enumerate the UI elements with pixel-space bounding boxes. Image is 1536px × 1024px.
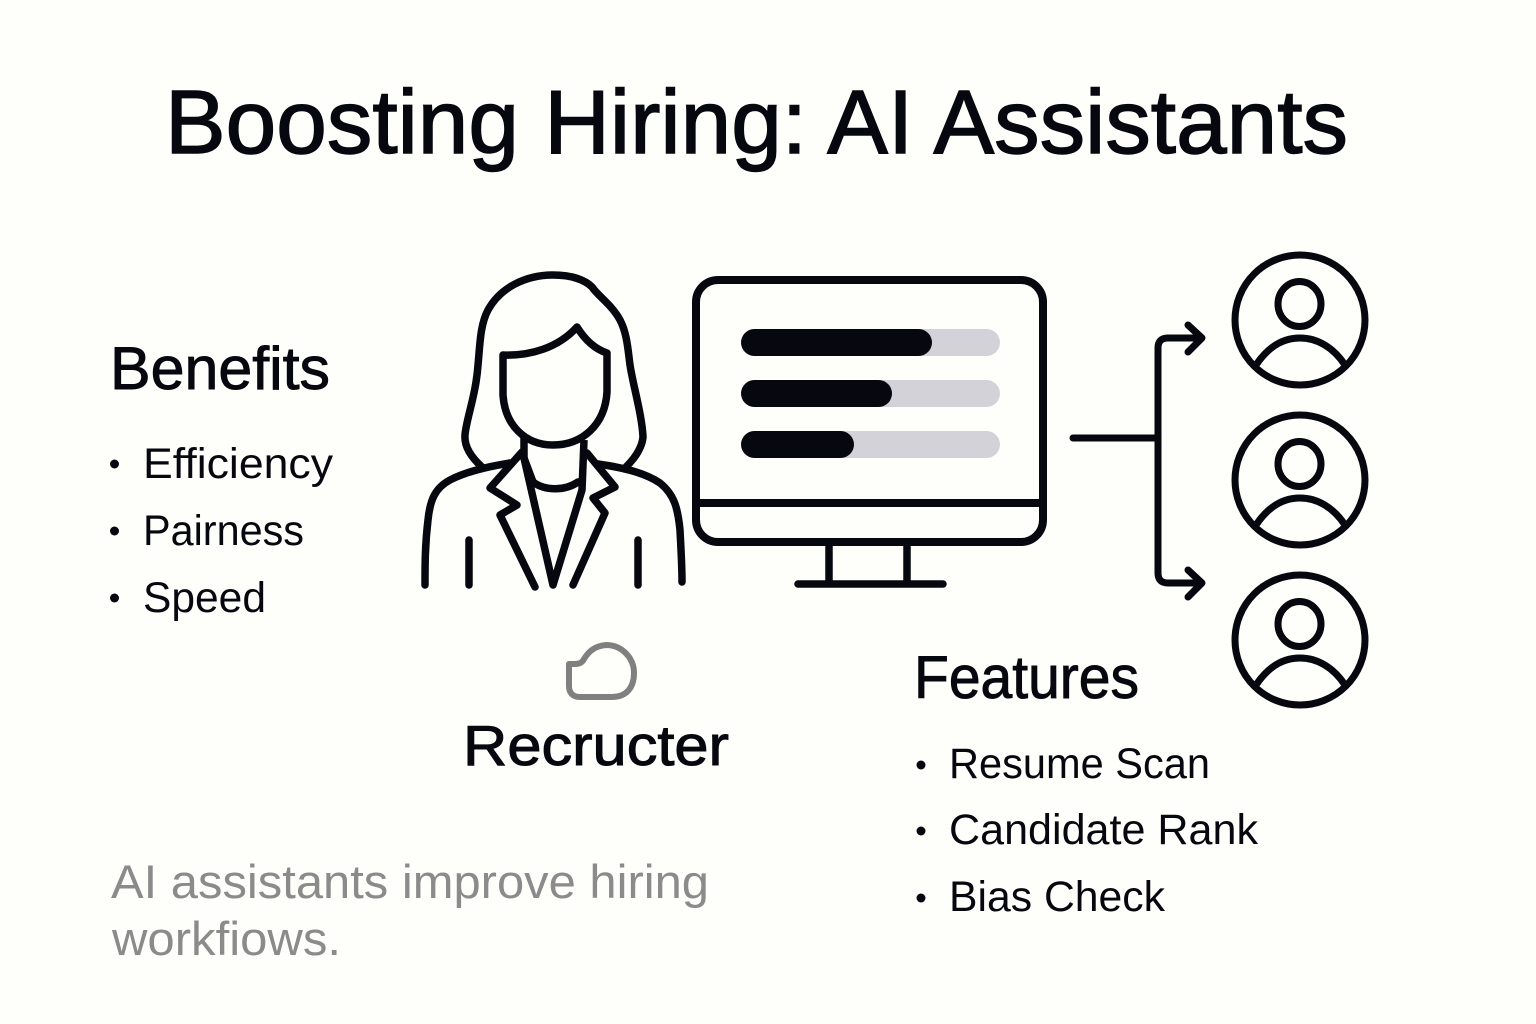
panel: benefits <box>110 335 334 622</box>
bar chart <box>741 329 1000 458</box>
panel: features <box>914 644 1258 921</box>
icon: candidate 1 <box>1235 255 1365 385</box>
heading: benefits: Benefits <box>110 335 330 402</box>
title: Boosting Hiring: AI Assistants <box>165 73 1348 173</box>
list: benefits <box>110 440 334 622</box>
icon: candidate 2 <box>1235 415 1365 545</box>
caption: AI assistants improve hiring <box>111 855 709 908</box>
list: features: Candidate Rank <box>949 806 1258 854</box>
list: benefits: Efficiency <box>143 440 334 488</box>
label: recruiter: Recructer <box>463 714 729 778</box>
list: features: Resume Scan <box>949 740 1210 788</box>
icon: speech cloud <box>569 645 634 697</box>
list: features <box>916 740 1258 921</box>
list: features: Bias Check <box>949 873 1165 921</box>
caption <box>111 855 709 965</box>
icon: recruiter figure <box>425 275 682 587</box>
icon: monitor with bars <box>696 280 1043 584</box>
caption: workfiows. <box>111 912 341 965</box>
arrow: branching to candidates <box>1073 325 1202 597</box>
list: benefits: Speed <box>143 574 266 622</box>
icon: candidate 3 <box>1235 575 1365 705</box>
list: benefits: Pairness <box>143 507 304 555</box>
heading: features: Features <box>914 644 1139 711</box>
